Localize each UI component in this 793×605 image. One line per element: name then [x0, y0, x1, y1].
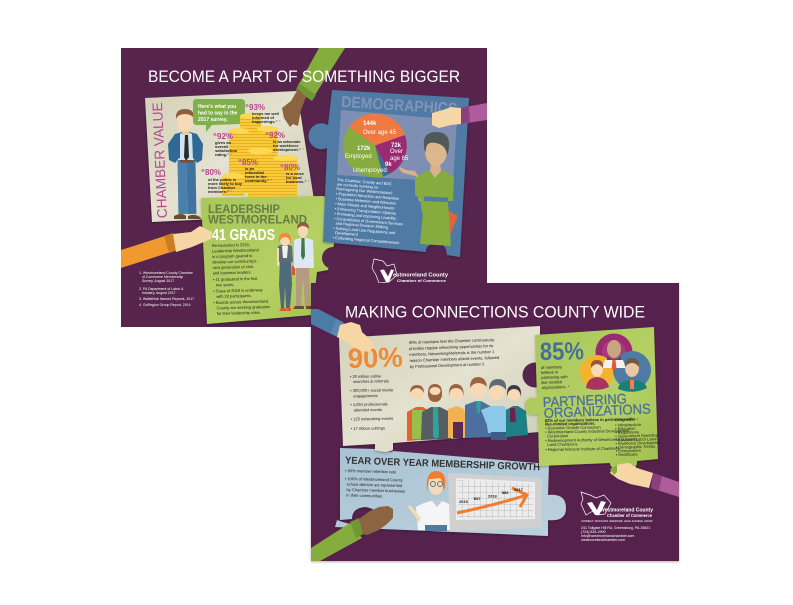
logo: westmoreland county bottom: info@westmorelandchamber.com — [581, 534, 634, 538]
pie chart: Over age 45 — [363, 130, 397, 136]
leadership description: for their leadership roles. — [217, 310, 261, 316]
demographics list: and Regional Decision Making — [336, 221, 388, 230]
partnering statement: believe in — [541, 369, 558, 375]
leadership description: Re-launched in 2015, — [212, 242, 250, 248]
survey statistics: is an — [245, 166, 255, 171]
survey statistics: influential — [245, 170, 264, 175]
networking paragraph: members. Networking/Referrals is the number 1 — [409, 349, 495, 357]
pie chart: 144k — [363, 121, 377, 127]
speech bubble — [193, 99, 245, 132]
logo: westmoreland county bottom: Chamber of Commerce — [607, 513, 653, 518]
growth chart: 2015 — [459, 499, 469, 504]
growth chart: 2016 — [488, 494, 498, 498]
pie chart: Employed — [345, 154, 372, 160]
chart background — [337, 110, 457, 182]
hand: green sleeve brown hand bottom — [311, 506, 393, 561]
leadership description: • Class of 2018 is underway — [213, 287, 263, 293]
survey statistics: members.” ” — [208, 189, 232, 194]
title: become a part: BECOME A PART OF SOMETHING BIGGER — [148, 68, 460, 86]
logo: westmoreland county bottom: Westmoreland County — [600, 508, 654, 514]
heading: demographics: DEMOGRAPHICS — [341, 94, 458, 118]
illustration: presenter woman — [399, 132, 458, 246]
networking list: engagements — [353, 393, 378, 398]
illustration: businessman — [168, 109, 203, 219]
heading: partnering organizations: PARTNERING — [542, 390, 627, 410]
footnotes: Industry, August 2017 — [142, 291, 176, 295]
core issues list: • Government Spending — [615, 432, 658, 439]
networking list: • 17 ribbon cuttings — [351, 425, 385, 431]
partners list: Corporation — [547, 433, 568, 438]
pie chart: Unemployed — [353, 168, 387, 174]
panel: become a part of something bigger — [121, 48, 487, 327]
core issues list: • Balanced Labor Laws — [615, 436, 657, 442]
demographics list: • Population Attraction and Retention — [336, 191, 399, 201]
panel: 90 percent networking — [339, 326, 548, 452]
partnering statement: partnering with — [541, 374, 568, 380]
core issues list: • Infrastructure — [615, 422, 642, 427]
survey statistics: gives an — [215, 140, 232, 145]
growth bullets: • 100% of Westmoreland County — [345, 476, 403, 483]
illustration: group of professionals — [407, 377, 528, 441]
pie chart: 72k — [391, 143, 402, 149]
networking paragraph: 90% of members feel the Chamber continuously — [409, 337, 494, 345]
footnotes: Survey, August 2017 — [142, 279, 174, 283]
demographics list: are currently working on — [337, 181, 378, 190]
core issues list: Core Issues ⁴ — [615, 417, 638, 422]
heading: membership growth: YEAR OVER YEAR MEMBERSHIP GROWTH — [345, 456, 540, 473]
footnotes: of Commerce Membership — [142, 275, 183, 279]
core issues list: • Regulations — [615, 429, 639, 435]
hand: blue sleeve — [311, 309, 374, 352]
growth bullets: school districts are represented — [347, 482, 402, 488]
speech bubble: had to say in the — [198, 110, 238, 116]
pie chart — [343, 114, 409, 177]
partners list: • Westmoreland County Industrial Development — [545, 428, 630, 434]
demographics list: The Chamber, County and EDC — [337, 177, 392, 186]
stat: 85%: 85% — [540, 337, 584, 366]
demographics list: • Cultivating Regional Competitiveness — [332, 235, 399, 245]
growth chart: 2017 — [514, 487, 524, 492]
speech bubble: 2017 survey. — [198, 117, 228, 123]
networking list: • 20 million online — [350, 373, 382, 379]
partners list: like-minded organizations. — [545, 421, 596, 426]
hand: pink sleeve bottom — [610, 463, 679, 497]
leadership description: develop our community's — [212, 258, 257, 264]
growth bullets: in their communities. — [346, 493, 383, 499]
partners list: • Regional Advisory Institute of Chambers — [545, 446, 619, 452]
demographics list: • Promoting and Improving Livability — [334, 211, 396, 221]
partners list: Land Champions — [547, 441, 578, 447]
survey statistics: for workforce — [273, 143, 299, 148]
growth bullets: • 90% member retention rate — [345, 468, 397, 474]
partners list: 83% of our members believe in partnering with — [545, 416, 634, 423]
purple notch — [322, 247, 344, 269]
partners list: • Economic Growth Connection — [545, 425, 601, 430]
heading: leadership westmoreland: WESTMORELAND — [208, 214, 307, 226]
hand: orange sleeve — [121, 226, 212, 268]
growth chart — [448, 473, 542, 532]
hand: green sleeve brown hand — [282, 48, 345, 127]
survey statistics: for local — [286, 175, 302, 180]
leadership description: Leadership Westmoreland — [212, 247, 259, 253]
hand: pink sleeve — [432, 103, 487, 128]
pie chart: Over — [390, 149, 403, 155]
survey statistics: satisfaction — [215, 148, 238, 153]
logo: westmoreland county bottom: (724) 834-2900 — [581, 530, 606, 534]
demographics list: • Solving Land Use Regulations and — [333, 225, 395, 235]
survey statistics: is an advocate — [273, 139, 301, 144]
panel: demographics — [308, 90, 469, 269]
growth chart: '857 — [473, 496, 481, 501]
logo: westmoreland county bottom — [581, 492, 654, 542]
survey statistics: business.” ” — [286, 179, 310, 184]
pie chart: age 65 — [390, 156, 409, 162]
footnotes: 1. Westmoreland County Chamber — [139, 271, 194, 275]
footnotes: 4. GoRegion Group Report, 2014 — [139, 303, 191, 307]
demographics list: • Enhancing Transportation Options — [335, 206, 396, 216]
demographics list: Development — [335, 230, 359, 237]
survey statistics: informed of — [252, 115, 275, 120]
growth chart: '886 — [501, 490, 509, 495]
survey statistics: “80% — [280, 163, 300, 172]
core issues list: • Workforce Development — [616, 440, 662, 446]
demographics list: • Main Streets and Neighborhoods — [335, 201, 395, 211]
survey statistics: “80% — [201, 168, 221, 177]
icon: partner portraits — [580, 334, 651, 392]
survey statistics — [201, 103, 310, 194]
pie chart: 9k — [385, 162, 392, 168]
pie chart: 172k — [357, 146, 371, 152]
networking list: • 123 networking events — [351, 416, 393, 421]
heading: chamber value: CHAMBER VALUE — [149, 102, 170, 219]
footnotes: 2. PA Department of Labor & — [139, 287, 184, 291]
survey statistics: overall — [215, 144, 228, 149]
networking paragraph: by Professional Development at number 2. — [410, 361, 485, 369]
leadership description: with 23 participants. — [216, 293, 252, 299]
leadership description: • Boards across Westmoreland — [213, 299, 268, 305]
leadership description: is a program geared to — [212, 253, 253, 259]
survey statistics: is a voice — [286, 171, 305, 176]
logo: westmoreland county bottom: CONNECT. ADVOCATE. ENERGIZE. LEAD. ACHIEVE. GROW. — [581, 519, 653, 523]
panel: leadership westmoreland — [201, 196, 335, 324]
logo: westmoreland county top: estmoreland County — [393, 272, 449, 278]
survey statistics: more likely to buy — [208, 181, 243, 186]
core issues list: • Healthcare — [616, 451, 639, 457]
networking paragraph: reason Chamber members attend events, followed — [409, 355, 499, 363]
partnering statement: like-minded — [541, 379, 562, 385]
heading: partnering organizations: ORGANIZATIONS — [543, 400, 651, 421]
survey statistics: of the public is — [208, 177, 237, 182]
partners list: • Redevelopment Authority of Westmoreland County — [545, 436, 638, 443]
survey statistics: force in the — [245, 174, 267, 179]
survey statistics: rating.” ” — [215, 152, 232, 157]
logo: westmoreland county top: Chamber of Commerce — [397, 279, 446, 283]
networking list: • 300,000+ social media — [350, 387, 394, 393]
heading: partnering organizations — [542, 390, 651, 421]
survey statistics: “92% — [213, 132, 233, 141]
survey statistics: community.” ” — [245, 178, 272, 183]
networking paragraph: provides regular networking opportunities for its — [409, 343, 493, 351]
logo: westmoreland county bottom: 241 Tollgate Hill Rd, Greensburg, PA 15601 — [581, 526, 650, 530]
survey statistics: keeps me well — [252, 111, 279, 116]
partnering statement: of members — [541, 364, 562, 370]
purple notch — [522, 362, 548, 388]
demographics list: Reimagining Our Westmoreland: — [336, 186, 393, 195]
survey statistics: from Chamber — [208, 185, 236, 190]
core issues list: • Demographic Trends — [616, 444, 655, 450]
networking list: searches & referrals — [353, 378, 389, 384]
leadership description: County are seeking graduates — [217, 304, 270, 310]
demographics list: • Business Retention and Attraction — [335, 196, 396, 206]
logo: westmoreland county top — [372, 259, 449, 283]
panel: chamber value — [145, 91, 314, 222]
leadership description: • 41 graduated in the first — [213, 276, 258, 282]
heading: leadership westmoreland: LEADERSHIP — [208, 204, 280, 216]
leadership description: and business leaders. — [213, 269, 252, 275]
partnering statement: organizations. ⁴ — [542, 384, 570, 390]
leadership description: two years. — [216, 282, 234, 287]
panel: partnering organizations — [525, 327, 662, 470]
logo: westmoreland county bottom: westmorelandchamber.com — [581, 538, 625, 542]
networking list: attended events — [354, 407, 382, 412]
stat: 41 grads: 41 GRADS — [212, 227, 275, 244]
title: making connections: MAKING CONNECTIONS COUNTY WIDE — [345, 304, 645, 322]
panel: making connections county wide — [311, 283, 679, 561]
survey statistics: “92% — [265, 131, 285, 140]
speech bubble: Here's what you — [198, 104, 236, 110]
core issues list: • Education — [615, 426, 636, 431]
illustration: graduates — [277, 222, 314, 311]
coin stacks — [222, 113, 297, 210]
core issues list: • Environment — [616, 448, 642, 453]
growth bullets: by Chamber member businesses — [346, 487, 405, 494]
illustration: woman with glasses — [408, 471, 453, 531]
survey statistics: happenings.” ” — [252, 119, 281, 124]
leadership description: next generation of civic — [212, 264, 254, 270]
panel: year over year growth — [335, 448, 566, 536]
survey statistics: “93% — [245, 103, 265, 112]
survey statistics: “85% — [238, 158, 258, 167]
footnotes: 3. WalletHub Named Reports, 2017 — [139, 297, 194, 301]
stat: 90%: 90% — [347, 342, 403, 374]
demographics list: • Consolidation of Government Services — [334, 216, 403, 226]
survey statistics: development.” ” — [273, 147, 304, 152]
networking list: • 4,834 professionals — [350, 401, 388, 407]
